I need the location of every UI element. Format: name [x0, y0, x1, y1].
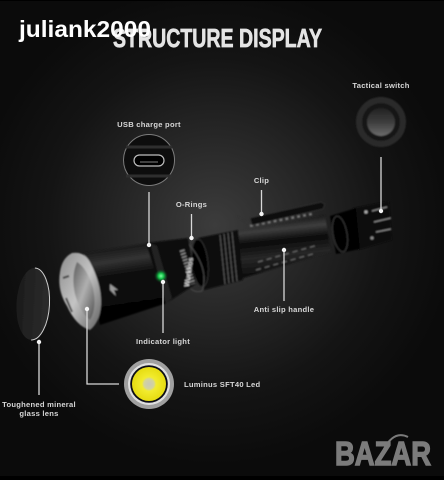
leader lines: [37, 157, 383, 395]
logo on barrel: [110, 284, 118, 296]
title: STRUCTURE DISPLAY: [113, 23, 322, 53]
flashlight head barrel: [84, 243, 167, 325]
tactical switch inset: [356, 97, 406, 147]
indicator green light: [154, 269, 168, 283]
USB port inset: [124, 134, 174, 186]
flashlight bezel: [59, 253, 101, 330]
labels: [2, 81, 410, 418]
flashlight tail cap: [330, 201, 392, 254]
flashlight handle: [236, 214, 331, 279]
labels: Toughened mineral: [2, 400, 76, 409]
labels: Tactical switch: [352, 81, 410, 90]
labels: glass lens: [19, 409, 59, 418]
labels: Indicator light: [136, 337, 190, 346]
flashlight: [59, 201, 392, 330]
labels: Anti slip handle: [254, 305, 314, 314]
LED inset: [124, 359, 174, 409]
flashlight collar: Wurkkos: [184, 257, 195, 287]
flashlight collar: [146, 238, 196, 304]
lens: [15, 267, 51, 341]
labels: Luminus SFT40 Led: [184, 380, 261, 389]
labels: O-Rings: [176, 200, 207, 209]
labels: USB charge port: [117, 120, 181, 129]
watermark: username: juliank2000: [18, 16, 151, 42]
labels: Clip: [254, 176, 269, 185]
flashlight threaded section: [187, 230, 243, 292]
flashlight clip: [237, 202, 325, 225]
